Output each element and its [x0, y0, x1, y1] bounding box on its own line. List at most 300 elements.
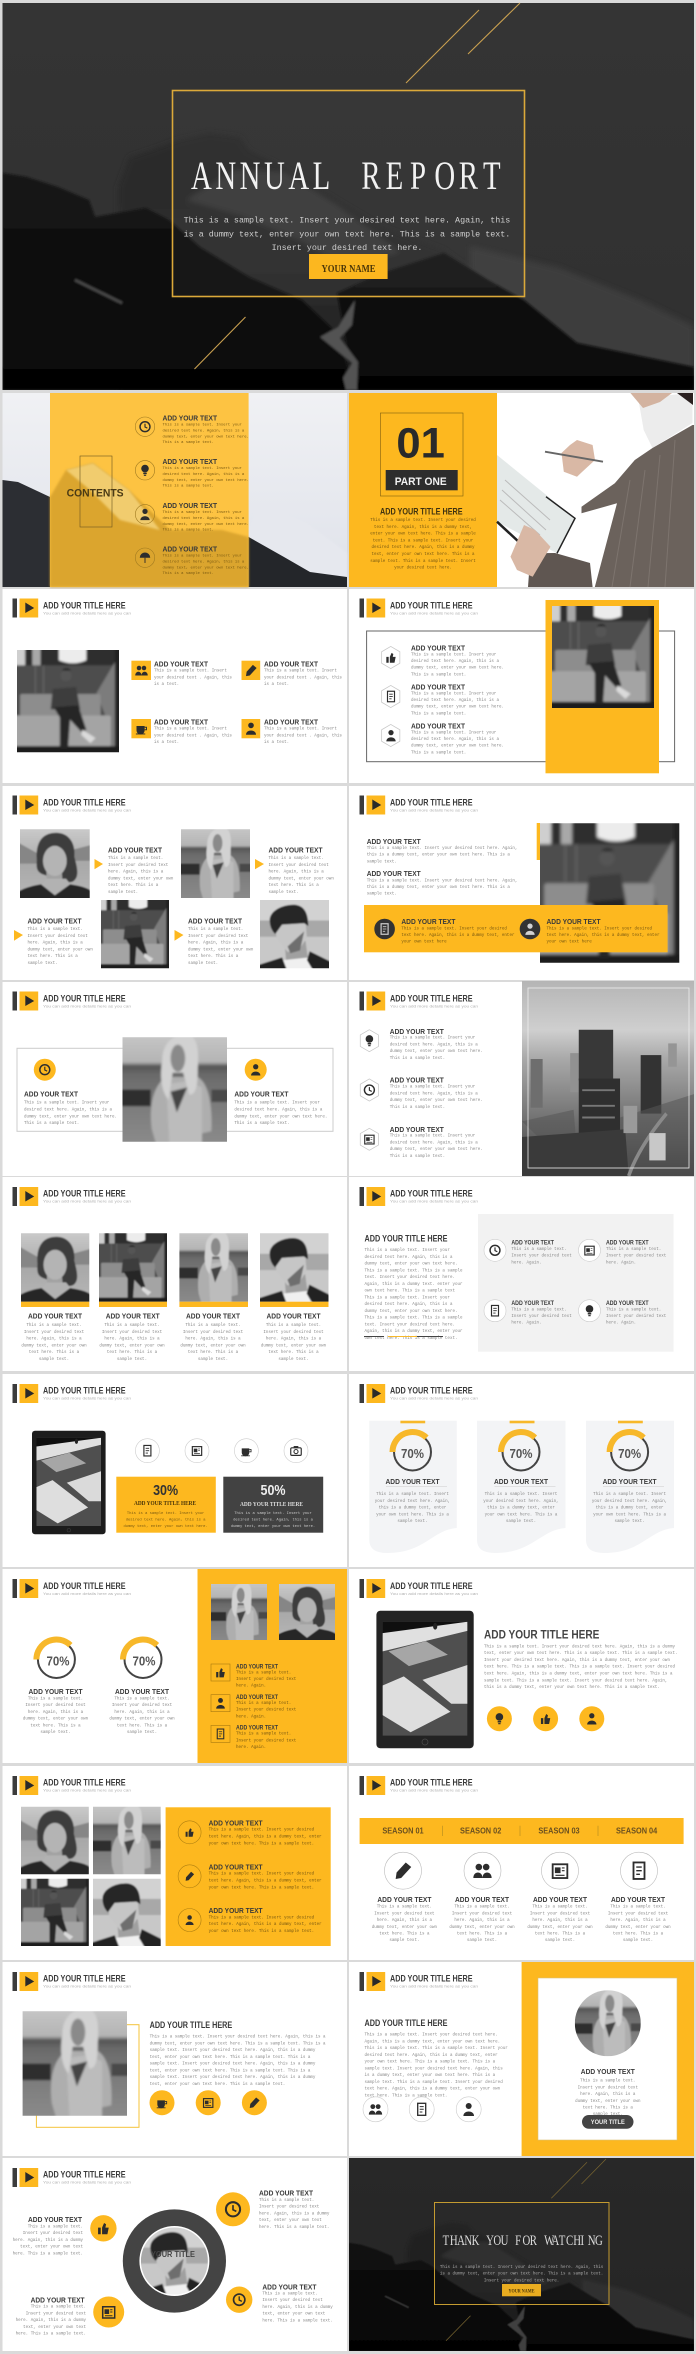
text block 3: text here. This is a	[28, 954, 78, 959]
callout bottom left: here. Again, this is a dummy	[16, 2318, 86, 2323]
item 4: ADD YOUR TEXT	[264, 717, 318, 726]
season column 4: here. Again, this is a	[610, 1918, 666, 1923]
slide header: ADD YOUR TITLE HERE	[43, 2170, 126, 2180]
central ring with portrait: YOUR TITLE	[151, 2250, 196, 2259]
left item: dummy text, enter your own text here.	[24, 1114, 117, 1119]
donut item 2: text here. This is a	[117, 1723, 168, 1728]
item 1: is a text.	[154, 682, 179, 687]
slide: framed list with yellow photo panel	[349, 589, 694, 783]
item 2: is a text.	[264, 682, 289, 687]
portrait card 2: sample text.	[117, 1357, 147, 1362]
donut item 2: ADD YOUR TEXT	[115, 1687, 169, 1696]
slide header: ADD YOUR TITLE HERE	[390, 1188, 473, 1198]
list item 2: dummy text, enter your own text here.	[411, 705, 504, 710]
callout top left	[13, 2215, 117, 2256]
50 percent box	[223, 1477, 323, 1533]
progress card 1: your own text here. This is a	[376, 1512, 449, 1517]
slide header: ADD YOUR TITLE HERE	[390, 1386, 473, 1396]
right item: ADD YOUR TEXT	[234, 1090, 289, 1099]
yellow band: your own text here	[401, 940, 447, 945]
thank you description: Insert your desired text here.	[484, 2278, 559, 2283]
profile card: here. Again, this is a	[580, 2092, 636, 2097]
50 percent box: desired text here. Again, this is a	[233, 1517, 314, 1522]
tablet text: Insert your desired text here. Again, this is a dummy text, enter your own	[484, 1658, 670, 1663]
list item 2: dummy text, enter your own text here.	[390, 1098, 483, 1103]
photo: blonde	[117, 1032, 232, 1147]
photo: businesswoman with clipboard	[497, 393, 694, 587]
long text column: Again, this is a dummy text, enter your	[364, 1329, 463, 1334]
yellow list panel: text here. Again, this is a dummy text, enter	[209, 1922, 322, 1927]
donut item 2: 70%	[132, 1654, 156, 1669]
list item 3: This is a sample text. Insert your	[390, 1135, 475, 1139]
photo: man on sofa close	[533, 816, 686, 970]
right item: This is a sample text. Insert your	[234, 1102, 320, 1106]
slide: photo with text and yellow circles	[2, 1962, 347, 2156]
slide header	[12, 598, 131, 618]
part one text	[370, 507, 476, 571]
text block: sample text. Insert your desired text here. Again, this is a dummy	[150, 2062, 316, 2067]
season column 2: text here. This is a	[457, 1932, 508, 1936]
text block 1: this is a dummy text, enter your own text here. This is a	[367, 853, 510, 858]
portrait card 2	[96, 1230, 170, 1362]
portrait card 2: ADD YOUR TEXT	[106, 1312, 160, 1321]
slide header	[360, 1187, 478, 1206]
progress card 3: your own text here. This is a	[593, 1512, 667, 1517]
season column 3: dummy text, enter your own	[527, 1925, 593, 1930]
slide header	[360, 598, 478, 618]
50 percent box: dummy text, enter your own text here.	[231, 1524, 315, 1529]
contents item 1: This is a sample text. Insert your	[162, 424, 242, 428]
slide header: You can add more details here as you can	[390, 1788, 478, 1792]
part one text: desired text here. Again, this is a dummy	[371, 545, 475, 550]
contents item 1: This is a sample text.	[162, 440, 214, 445]
slide header: You can add more details here as you can	[43, 808, 131, 812]
season column 4: text here. This is a	[613, 1932, 664, 1936]
thank you description: This is a sample text. Insert your desired text here. Again, this	[440, 2266, 603, 2270]
long text column: This is a sample text. Insert your	[364, 1249, 450, 1253]
portrait card 4: dummy text, enter your own	[261, 1343, 327, 1348]
portrait card 3	[176, 1230, 251, 1362]
portrait card 1: sample text.	[39, 1357, 69, 1362]
contents item 4	[135, 545, 249, 576]
slide header	[12, 2168, 131, 2187]
donut item 1: ADD YOUR TEXT	[28, 1687, 83, 1696]
cover description: This is a sample text. Insert your desired text here. Again, this	[184, 216, 510, 226]
slide header	[12, 992, 131, 1010]
slide header	[360, 1776, 478, 1795]
season column 2: ADD YOUR TEXT	[455, 1895, 509, 1904]
long text column: ADD YOUR TITLE HERE	[364, 1233, 448, 1243]
part one text: ADD YOUR TITLE HERE	[380, 507, 463, 517]
text block 1: ADD YOUR TEXT	[367, 837, 421, 846]
donut item 2: This is a sample text.	[114, 1697, 170, 1701]
list item 1: This is a sample text. Insert your	[390, 1037, 475, 1041]
callout top left: ADD YOUR TEXT	[28, 2215, 82, 2224]
yellow list panel: your own text here. This is a sample text.	[209, 1885, 314, 1890]
your name button	[502, 2284, 541, 2296]
tablet	[376, 1611, 474, 1748]
list item 1: This is a sample text.	[390, 1056, 445, 1061]
contents item 3: This is a sample text. Insert your	[162, 511, 242, 515]
contents item 2	[135, 457, 249, 489]
callout bottom right: here. This is a sample text.	[262, 2318, 333, 2323]
donut item 1: sample text.	[40, 1730, 71, 1735]
yellow list panel: This is a sample text. Insert your desired	[209, 1873, 314, 1877]
photo: man	[257, 897, 332, 972]
yellow panel	[50, 393, 249, 587]
gray icon panel: This is a sample text.	[606, 1308, 661, 1312]
text block 2: ADD YOUR TEXT	[367, 869, 421, 878]
item 3: your desired text . Again, this	[154, 733, 232, 738]
part one text: sample text. This is a sample text. Insert	[370, 559, 476, 564]
long text column: This is a sample text. Insert your	[364, 1295, 450, 1300]
gray icon panel: ADD YOUR TEXT	[511, 1240, 554, 1247]
list item 3: This is a sample text.	[411, 750, 466, 755]
list item 3: This is a sample text.	[390, 1154, 445, 1159]
season column 1: here. Again, this is a	[377, 1918, 433, 1923]
list item 3: dummy text, enter your own text here.	[411, 744, 504, 749]
slide header: You can add more details here as you can	[43, 1004, 131, 1008]
text block 3: Insert your desired text	[28, 934, 88, 939]
cover description: Insert your desired text here.	[272, 243, 422, 253]
list item 2	[382, 682, 504, 716]
contents item 2: This is a sample text.	[162, 484, 214, 489]
portrait card 1: text here. This is a	[29, 1350, 80, 1355]
portrait card 1: Insert your desired text	[24, 1330, 85, 1335]
callout top left: here. Again, this is a dummy	[13, 2238, 83, 2243]
callout bottom left: Insert your desired text	[26, 2311, 86, 2316]
text block 4: dummy text, enter your own	[188, 947, 254, 952]
slide header	[12, 1187, 131, 1206]
text block: text here. This is a sample text.	[364, 2093, 447, 2098]
item 3: is a text.	[154, 740, 179, 745]
callout top right: text, enter your own text	[259, 2219, 322, 2223]
cover title: ANNUAL REPORT	[191, 153, 501, 198]
slide: thank you	[349, 2158, 694, 2351]
slide header	[360, 1579, 478, 1598]
list item 1: ADD YOUR TEXT	[411, 643, 465, 652]
text block 3: dummy text, enter your own	[28, 947, 93, 952]
slide header: ADD YOUR TITLE HERE	[43, 1974, 126, 1984]
icon circles	[363, 2097, 481, 2122]
yellow panel: here. Again.	[236, 1714, 266, 1719]
gray icon panel: Insert your desired text	[511, 1314, 572, 1319]
right item: dummy text, enter your own text here.	[234, 1114, 327, 1119]
slide header	[12, 796, 131, 814]
slide header	[12, 1384, 131, 1403]
profile card: dummy text, enter your own	[575, 2099, 641, 2104]
portrait card 3: Insert your desired text	[183, 1330, 244, 1335]
portrait card 1	[18, 1230, 93, 1362]
item 3: This is a sample text. Insert	[154, 728, 227, 732]
long text column: dummy text, enter your own text here.	[364, 1309, 457, 1314]
callout top right: This is a sample text.	[259, 2199, 314, 2203]
slide: seasons	[349, 1766, 694, 1960]
text block: This is a sample text. Insert your desired text here. Again, this is a	[150, 2036, 326, 2040]
progress card 1: your desired text here. Again,	[375, 1499, 450, 1504]
your name button: YOUR NAME	[508, 2289, 535, 2294]
progress card 3: this is a dummy text, enter	[596, 1506, 664, 1510]
slide: city photo with hexagon list	[349, 981, 694, 1176]
donut item 1: 70%	[46, 1654, 70, 1669]
portrait card 1: dummy text, enter your own	[21, 1343, 87, 1348]
text block 4: sample text.	[188, 961, 218, 966]
yellow panel: ADD YOUR TEXT	[236, 1694, 278, 1701]
yellow list panel: This is a sample text. Insert your desired	[209, 1829, 314, 1833]
text block 1: text here. This is a	[108, 883, 159, 888]
text block: dummy text, enter your own text here. This is a sample text. This is a	[150, 2041, 326, 2046]
season column 2: dummy text, enter your own	[449, 1925, 515, 1930]
list item 1: dummy text, enter your own text here.	[390, 1049, 483, 1054]
contents item 1: desired text here. Again, this is a	[162, 428, 245, 433]
yellow panel: This is a sample text.	[236, 1671, 291, 1675]
list item 1: ADD YOUR TEXT	[390, 1027, 444, 1036]
contents item 4: dummy text, enter your own text here.	[162, 565, 249, 570]
tablet text: This is a sample text. Insert your desired text here. Again, this is a dummy	[484, 1645, 675, 1649]
yellow list panel: your own text here. This is a sample text.	[209, 1841, 314, 1846]
text block: Again, this is a dummy text, enter your own text here.	[364, 2039, 500, 2044]
text block 1: ADD YOUR TEXT	[108, 845, 162, 854]
yellow panel: This is a sample text.	[236, 1733, 291, 1737]
callout bottom right: ADD YOUR TEXT	[262, 2282, 317, 2291]
list item 2: ADD YOUR TEXT	[411, 682, 465, 691]
gray icon panel: Insert your desired text	[606, 1314, 667, 1319]
season column 1: dummy text, enter your own	[372, 1925, 438, 1930]
slide header: You can add more details here as you can	[43, 1984, 131, 1988]
number box	[380, 413, 463, 496]
gray icon panel: This is a sample text.	[511, 1308, 567, 1312]
season band	[360, 1818, 684, 1844]
30 percent box: This is a sample text. Insert your	[127, 1512, 204, 1516]
30 percent box: dummy text, enter your own text here.	[123, 1524, 208, 1529]
season column 2	[449, 1852, 515, 1943]
season column 1: sample text.	[389, 1938, 419, 1943]
slide header	[360, 992, 478, 1010]
portrait card 2: here. Again, this is a	[104, 1336, 160, 1342]
gray icon panel: here. Again.	[511, 1321, 542, 1326]
season column 4	[605, 1852, 671, 1943]
decorative gold slash top	[194, 3, 520, 369]
yellow list panel: ADD YOUR TEXT	[209, 1862, 263, 1871]
callout top left: here. This is a sample text.	[13, 2251, 83, 2256]
slide: long text and gray icon panel	[349, 1177, 694, 1371]
contents item 2: ADD YOUR TEXT	[162, 457, 217, 466]
central ring with portrait	[123, 2209, 226, 2313]
donut item 1: This is a sample text.	[28, 1697, 83, 1701]
30 percent box	[116, 1477, 216, 1533]
text block 2: dummy text, enter your own	[268, 876, 334, 881]
text block	[364, 2018, 508, 2098]
long text column: desired text here. Again, this is a	[364, 1255, 453, 1260]
donut item 2: Insert your desired text	[112, 1703, 173, 1708]
left item: ADD YOUR TEXT	[24, 1090, 78, 1099]
slide header: You can add more details here as you can	[390, 1396, 478, 1400]
yellow list panel	[166, 1807, 331, 1946]
slide header: You can add more details here as you can	[390, 612, 478, 616]
arrows	[14, 859, 264, 941]
contents item 4: This is a sample text.	[162, 571, 214, 576]
text block: desired text here. Again, this is a dummy text, enter	[364, 2053, 498, 2058]
yellow panel: Insert your desired text	[236, 1677, 297, 1682]
list item 1	[382, 643, 504, 677]
text block 4: text here. This is a	[188, 954, 239, 959]
donut item 2: sample text.	[127, 1730, 157, 1735]
season column 3: Insert your desired text	[530, 1911, 591, 1916]
portrait card 4	[257, 1230, 332, 1362]
gray icon panel: ADD YOUR TEXT	[511, 1300, 554, 1307]
yellow band: This is a sample text. Insert your desired	[546, 927, 652, 931]
season column 1	[372, 1852, 438, 1943]
list item 2	[360, 1076, 483, 1110]
yellow panel: ADD YOUR TEXT	[236, 1725, 278, 1732]
slide header: ADD YOUR TITLE HERE	[43, 1188, 126, 1198]
progress card 1: sample text.	[397, 1519, 428, 1524]
slide: four portraits in a row	[2, 1177, 347, 1371]
slide: central photo in frame	[2, 982, 347, 1176]
slide header	[360, 1972, 478, 1991]
progress card 1: This is a sample text. Insert	[376, 1493, 449, 1497]
yellow band: This is a sample text. Insert your desired	[401, 927, 507, 931]
slide: tablet and percentage boxes	[2, 1374, 347, 1567]
portrait card 3: dummy text, enter your own	[180, 1343, 246, 1348]
progress card 3: your desired text here. Again,	[592, 1499, 667, 1504]
left item: This is a sample text.	[24, 1121, 79, 1126]
gray icon panel: here. Again.	[511, 1260, 542, 1265]
list item 2: This is a sample text.	[390, 1105, 445, 1110]
contents item 3: desired text here. Again, this is a	[162, 516, 245, 521]
part one text: enter your own text here. This is a sample	[370, 532, 476, 537]
item 2: your desired text . Again, this	[264, 675, 342, 680]
text block 3: here. Again, this is a	[28, 941, 83, 946]
portrait card 3: here. Again, this is a	[185, 1336, 241, 1342]
left item: desired text here. Again, this is a	[24, 1108, 112, 1112]
text block 4: This is a sample text.	[188, 928, 243, 932]
season column 1: Insert your desired text	[374, 1911, 435, 1916]
yellow list panel: your own text here. This is a sample text.	[209, 1929, 314, 1934]
list item 1: dummy text, enter your own text here.	[411, 666, 504, 671]
season band: SEASON 03	[538, 1827, 580, 1836]
tablet text: sample text. This is a sample text. Insert your desired text here. Again,	[484, 1678, 667, 1683]
slide: photo with four icons	[2, 589, 347, 783]
long text column: text. Insert your desired text here.	[364, 1322, 455, 1327]
slide: text with profile card	[349, 1962, 694, 2156]
yellow list panel: This is a sample text. Insert your desired	[209, 1916, 314, 1920]
item 3: ADD YOUR TEXT	[154, 717, 208, 726]
icon circles	[135, 1439, 308, 1463]
gray icon panel: ADD YOUR TEXT	[606, 1300, 649, 1307]
yellow panel	[198, 1569, 347, 1763]
season column 3: This is a sample text.	[532, 1906, 588, 1910]
text block 2: This is a sample text.	[268, 857, 324, 861]
text block	[150, 2020, 326, 2087]
season column 1: This is a sample text.	[377, 1906, 432, 1910]
right item	[234, 1059, 327, 1126]
donut item 2: dummy text, enter your own	[109, 1717, 175, 1722]
text block 1: here. Again, this is a	[108, 870, 164, 875]
season band: SEASON 01	[382, 1827, 424, 1836]
progress card 3: sample text.	[615, 1519, 645, 1524]
text block 2	[367, 869, 517, 897]
item 4: This is a sample text. Insert	[264, 728, 337, 732]
text block 2: sample text.	[367, 892, 397, 897]
contents item 2: dummy text, enter your own text here.	[162, 478, 249, 483]
text block 4: ADD YOUR TEXT	[188, 916, 242, 925]
right item: desired text here. Again, this is a	[234, 1108, 323, 1112]
text block: text, enter your own text here. This is a sample text. This is a	[150, 2055, 311, 2060]
slide: central ring with four callouts	[2, 2158, 347, 2351]
contents item 4: This is a sample text. Insert your	[162, 554, 242, 558]
season column 4: This is a sample text.	[610, 1906, 666, 1910]
callout top right: here. This is a sample text.	[259, 2225, 329, 2230]
yellow icon circles	[487, 1706, 604, 1731]
list item 3: dummy text, enter your own text here.	[390, 1147, 483, 1152]
text block 1	[108, 845, 174, 895]
profile card: YOUR TITLE	[591, 2120, 625, 2126]
number box: 01	[396, 420, 445, 468]
30 percent box: 30%	[153, 1482, 178, 1499]
photo grid	[18, 1803, 164, 1949]
contents item 3: dummy text, enter your own text here.	[162, 522, 249, 527]
season column 1: text here. This is a	[379, 1932, 430, 1936]
item 2: This is a sample text. Insert	[264, 670, 337, 674]
text block 2: This is a sample text. Insert your desired text here. Again,	[367, 879, 517, 883]
gray icon panel: This is a sample text.	[511, 1248, 567, 1252]
text block: This is a sample text. This is a sample text. Insert your	[364, 2046, 508, 2051]
donut item 1: text here. This is a	[30, 1723, 81, 1728]
yellow band: text here. Again, this is a dummy text, enter	[546, 933, 660, 938]
progress card 2: This is a sample text. Insert	[485, 1493, 557, 1497]
progress card 2	[477, 1421, 566, 1553]
portrait card 1: ADD YOUR TEXT	[28, 1312, 82, 1321]
season column 2: here. Again, this is a	[454, 1918, 510, 1923]
slide header	[12, 1776, 131, 1795]
season column 4: Insert your desired text	[608, 1911, 669, 1916]
progress card 2: 70%	[510, 1446, 533, 1461]
long text column: own text here. This is a sample text	[364, 1288, 455, 1294]
item 3	[131, 717, 232, 745]
tablet text: text here. This is a sample text. This is a sample text. Insert your desired	[484, 1665, 675, 1670]
text block 1: Insert your desired text	[108, 863, 169, 868]
yellow panel: Insert your desired text	[236, 1708, 297, 1713]
season column 4: sample text.	[623, 1938, 653, 1943]
portrait card 2: text here. This is a	[107, 1350, 158, 1355]
season column 1: ADD YOUR TEXT	[377, 1895, 432, 1904]
profile card: text here. This is a	[583, 2106, 633, 2110]
callout bottom right: Insert your desired text	[262, 2298, 323, 2303]
tablet text: text here. Again, this is a dummy text, enter your own text here. This is a	[484, 1672, 673, 1676]
30 percent box: desired text here. Again, this is a	[126, 1517, 206, 1522]
yellow icon circles	[150, 2090, 267, 2115]
progress card 3	[586, 1421, 674, 1553]
long text column: This is a sample text. This is a sample	[364, 1268, 463, 1273]
list item 2: This is a sample text. Insert your	[411, 692, 496, 696]
50 percent box: ADD YOUR TITLE HERE	[240, 1501, 303, 1508]
slide header: You can add more details here as you can	[43, 1396, 131, 1400]
slide header: You can add more details here as you can	[390, 1004, 478, 1008]
contents item 1: ADD YOUR TEXT	[162, 414, 217, 423]
season column 4: dummy text, enter your own	[605, 1925, 671, 1930]
portrait card 3: This is a sample text.	[185, 1324, 241, 1328]
donut item 2	[109, 1639, 175, 1735]
yellow band: ADD YOUR TEXT	[401, 917, 456, 926]
donut item 1	[23, 1639, 89, 1735]
text block 2: this is a dummy text, enter your own text here. This is a	[367, 885, 510, 890]
text block: sample text. Insert your desired text here. Again, this is a dummy	[150, 2075, 316, 2080]
callout bottom left	[16, 2295, 124, 2337]
item 4	[242, 717, 342, 745]
part one text: text here. Again, this is a dummy text,	[374, 525, 472, 530]
gray icon panel: This is a sample text.	[606, 1248, 661, 1252]
